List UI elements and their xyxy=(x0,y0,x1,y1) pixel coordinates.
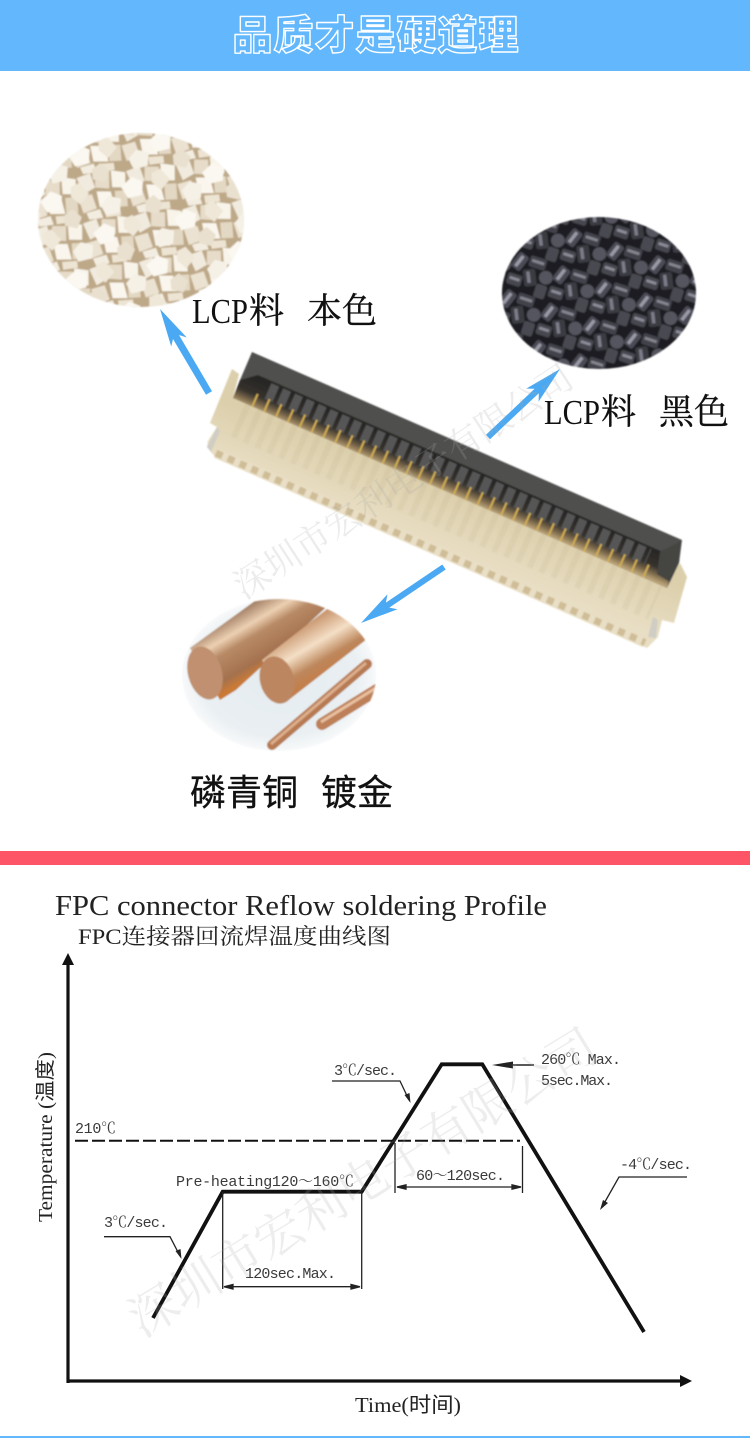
title: 品质才是硬道理 xyxy=(232,3,520,61)
temperature curve xyxy=(153,1064,644,1332)
peak arrow xyxy=(492,1062,534,1068)
label: LCP natural: 本色 xyxy=(307,284,377,334)
label: phosphor bronze gold plating: 磷青铜 xyxy=(190,764,298,816)
second ramp rate leader xyxy=(332,1081,410,1103)
header banner xyxy=(0,0,750,71)
right end block xyxy=(657,541,681,582)
x axis label: Time(时间) xyxy=(355,1393,461,1417)
label: LCP natural: 料 xyxy=(249,284,284,334)
side tabs xyxy=(648,617,658,638)
reflow chart heading: FPC connector Reflow soldering Profile xyxy=(55,891,547,922)
x axis xyxy=(67,1375,692,1387)
image: black LCP pellets xyxy=(502,217,696,369)
bottom blue line xyxy=(0,1436,750,1438)
gold pins xyxy=(254,400,648,572)
reflow duration label: 60～120sec. xyxy=(416,1168,505,1185)
second ramp rate label: 3℃/sec. xyxy=(334,1063,397,1080)
label: LCP black: LCP xyxy=(544,393,600,432)
watermark: chart: 深圳市宏利电子有限公司 xyxy=(113,1009,609,1351)
label: phosphor bronze gold plating xyxy=(190,764,393,816)
arrow: to black pellets xyxy=(486,369,560,439)
label: LCP natural xyxy=(192,284,377,334)
dark actuator xyxy=(233,352,682,588)
connector cream body xyxy=(207,369,687,648)
label: LCP black: 料 xyxy=(601,385,636,435)
210 degree label: 210℃ xyxy=(75,1121,116,1138)
contact zone xyxy=(233,375,672,588)
first ramp rate label: 3℃/sec. xyxy=(104,1215,168,1232)
arrow: to natural pellets xyxy=(160,309,212,395)
pre-heating duration label: 120sec.Max. xyxy=(245,1266,336,1283)
reflow soldering chart xyxy=(34,953,692,1417)
y axis label: Temperature (温度) xyxy=(34,1052,57,1222)
label: LCP black xyxy=(544,385,729,435)
peak duration label: 5sec.Max. xyxy=(541,1073,613,1090)
actuator teeth xyxy=(268,391,648,557)
peak temperature label: 260℃ Max. xyxy=(541,1052,621,1069)
cooling rate leader xyxy=(600,1177,687,1210)
first ramp rate leader xyxy=(104,1237,182,1259)
pre-heating duration bracket xyxy=(223,1192,362,1289)
connector product photo xyxy=(207,352,687,648)
red divider band xyxy=(0,851,750,865)
label: LCP black: 黑色 xyxy=(659,385,729,435)
label: LCP natural: LCP xyxy=(192,292,248,331)
cooling rate label: -4℃/sec. xyxy=(620,1157,692,1174)
reflow chart subheading: FPC连接器回流焊温度曲线图 xyxy=(78,924,391,949)
image: natural LCP pellets xyxy=(38,133,244,307)
arrow: to copper rods xyxy=(361,564,446,623)
pre-heating label: Pre-heating120～160℃ xyxy=(176,1174,354,1191)
y axis xyxy=(62,953,74,1383)
watermark: top: 深圳市宏利电子有限公司 xyxy=(222,351,582,609)
image: phosphor bronze rods xyxy=(182,590,385,751)
label: phosphor bronze gold plating: 镀金 xyxy=(321,764,393,816)
210 degree dashed line xyxy=(75,1140,520,1142)
reflow duration bracket xyxy=(395,1143,522,1193)
terminal strip xyxy=(216,453,645,642)
